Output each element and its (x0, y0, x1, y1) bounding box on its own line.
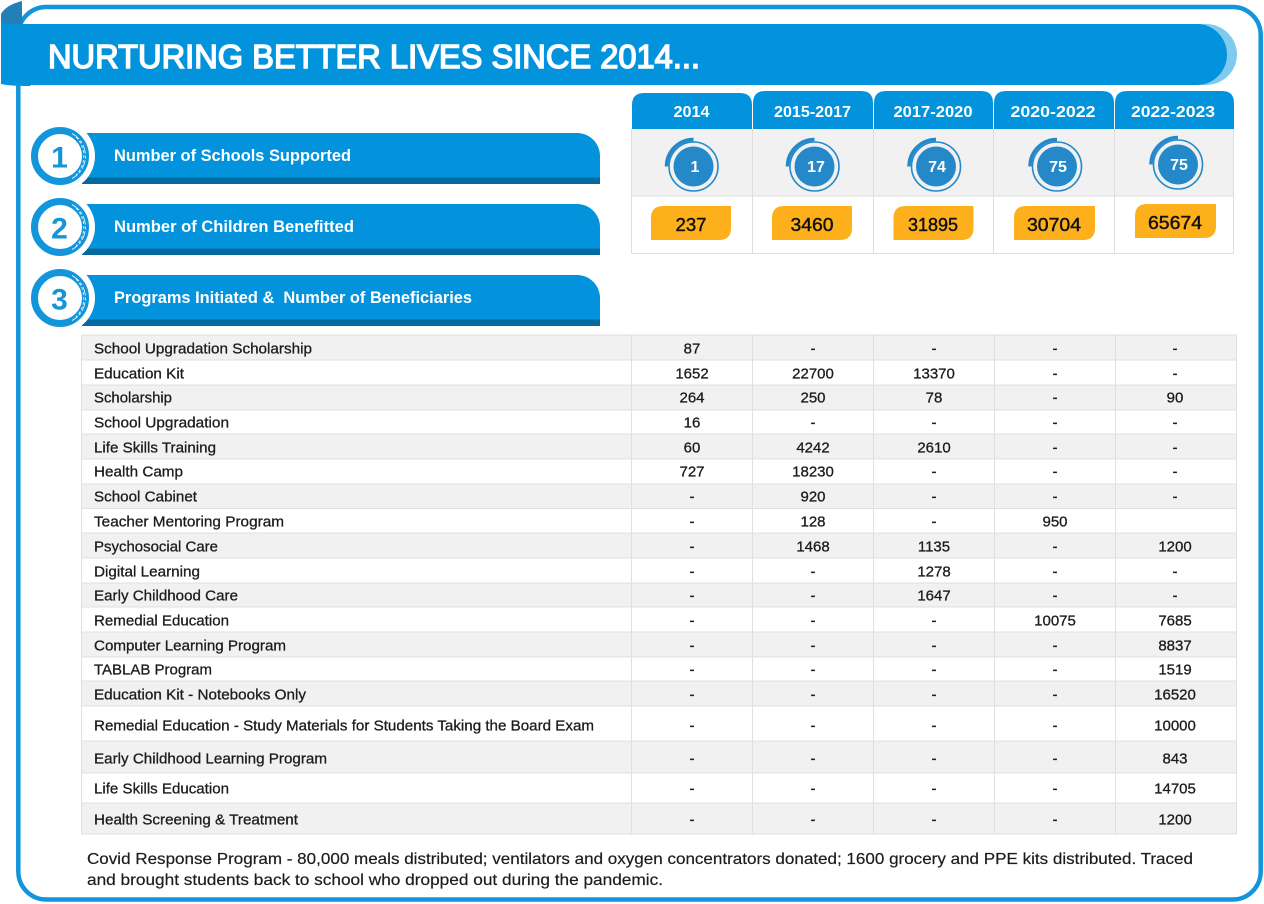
row: School Cabinet: - (690, 488, 694, 505)
row: School Cabinet (94, 488, 1178, 505)
summary table by period (632, 91, 1234, 254)
row: Early Childhood Learning Program: - (810, 750, 816, 767)
row: Health Camp: 18230 (792, 463, 834, 480)
title: NURTURING BETTER LIVES SINCE 2014... (48, 38, 700, 75)
section banner 2: children benefitted: 2 (51, 212, 68, 246)
row: TABLAB Program: - (1052, 661, 1058, 678)
row: TABLAB Program: - (932, 661, 936, 678)
row: Life Skills Education: - (810, 780, 816, 797)
row: Psychosocial Care: - (690, 538, 694, 555)
row: Education Kit: - (1052, 365, 1058, 382)
row: School Cabinet: School Cabinet (94, 488, 198, 505)
row: Digital Learning: - (1172, 563, 1178, 580)
row: Life Skills Education (94, 780, 1196, 797)
children benefitted tags: 237 (676, 214, 706, 235)
row: Remedial Education: 10075 (1034, 612, 1076, 629)
row: Life Skills Training (94, 439, 1178, 456)
section banner 2: children benefitted (25, 192, 600, 262)
row: Early Childhood Care: - (1052, 587, 1058, 604)
row: Computer Learning Program: - (1052, 637, 1058, 654)
row: Teacher Mentoring Program: 128 (800, 513, 826, 530)
row: School Upgradation Scholarship: - (810, 340, 816, 357)
row: Education Kit: Education Kit (94, 365, 185, 382)
row: Health Screening & Treatment (94, 811, 1192, 828)
row: Education Kit: - (1172, 365, 1178, 382)
row: Life Skills Training: 60 (684, 439, 700, 456)
row: Life Skills Training: - (1052, 439, 1058, 456)
row: Health Screening & Treatment: - (810, 811, 816, 828)
row: Digital Learning: - (1052, 563, 1058, 580)
section banner 1: schools supported: 1 (51, 142, 68, 174)
row: School Upgradation Scholarship (94, 340, 1178, 357)
row: Education Kit: 1652 (675, 365, 709, 382)
row: Remedial Education - Study Materials: - (810, 717, 816, 734)
row: Digital Learning (94, 563, 1178, 580)
row: Life Skills Education: - (1052, 780, 1058, 797)
schools supported gauges: 74 (928, 159, 946, 176)
row: School Upgradation Scholarship: 87 (684, 340, 700, 357)
row: Early Childhood Care: 1647 (917, 587, 951, 604)
row: Health Camp: 727 (679, 463, 705, 480)
row: Early Childhood Care: - (810, 587, 816, 604)
row: School Upgradation Scholarship: - (932, 340, 936, 357)
row: Education Kit - Notebooks Only (94, 686, 1196, 703)
row: Scholarship (94, 389, 1183, 406)
row: Health Camp: - (1052, 463, 1058, 480)
period headers (632, 91, 1234, 129)
row: Teacher Mentoring Program: - (932, 513, 936, 530)
row: School Cabinet: 920 (800, 488, 826, 505)
row: Teacher Mentoring Program: - (690, 513, 694, 530)
row: Health Screening & Treatment: - (690, 811, 694, 828)
row: School Cabinet: - (932, 488, 936, 505)
section banner 3: programs initiated: 3 (51, 284, 68, 316)
row: Computer Learning Program (94, 637, 1192, 654)
row: School Upgradation: 16 (684, 414, 700, 431)
row: Early Childhood Care: - (690, 587, 694, 604)
row: School Upgradation: - (932, 414, 936, 431)
section banner 1: schools supported: Number of Schools Supported (114, 147, 351, 165)
children benefitted tags: 30704 (1027, 214, 1081, 235)
row: Computer Learning Program: - (810, 637, 816, 654)
row: Health Camp: - (1172, 463, 1178, 480)
row: Health Screening & Treatment: Health Screening & Treatment (94, 811, 299, 828)
period headers: 2014 (674, 104, 710, 121)
row: Psychosocial Care (94, 538, 1192, 555)
row: Teacher Mentoring Program: 950 (1042, 513, 1068, 530)
row: Health Camp: Health Camp (94, 463, 183, 480)
row: Remedial Education: Remedial Education (94, 612, 229, 629)
row: Remedial Education: - (810, 612, 816, 629)
row: School Upgradation: - (810, 414, 816, 431)
row: TABLAB Program: TABLAB Program (94, 661, 212, 678)
title banner (1, 1, 1237, 86)
children benefitted tags: 65674 (1148, 212, 1202, 233)
row: Education Kit - Notebooks Only: - (1052, 686, 1058, 703)
section banner 1: schools supported (25, 121, 600, 191)
row: Remedial Education - Study Materials (94, 717, 1196, 734)
row: Early Childhood Care: - (1172, 587, 1178, 604)
row: Remedial Education - Study Materials: - (932, 717, 936, 734)
period headers: 2017-2020 (894, 104, 973, 121)
covid response footnote: and brought students back to school who dropped out during the pandemic. (87, 872, 663, 889)
row: Computer Learning Program: - (932, 637, 936, 654)
schools supported gauges: 1 (691, 159, 700, 176)
section banner 2: children benefitted: Number of Children Benefitted (114, 218, 354, 236)
row: Education Kit - Notebooks Only: - (932, 686, 936, 703)
row: Digital Learning: - (810, 563, 816, 580)
row: Early Childhood Learning Program (94, 750, 1188, 767)
row: Education Kit - Notebooks Only: - (810, 686, 816, 703)
row: Education Kit - Notebooks Only: 16520 (1154, 686, 1196, 703)
covid response footnote: Covid Response Program - 80,000 meals distributed; ventilators and oxygen concentrators donated; 1600 grocery and PPE kits distributed. Traced (87, 851, 1193, 868)
schools supported gauges: 17 (807, 159, 825, 176)
row: Computer Learning Program: - (690, 637, 694, 654)
row: Remedial Education - Study Materials: - (690, 717, 694, 734)
row: Education Kit: 22700 (792, 365, 834, 382)
schools supported gauges (666, 138, 1202, 191)
children benefitted tags (651, 204, 1216, 240)
row: Psychosocial Care: 1135 (918, 538, 950, 555)
row: Digital Learning: 1278 (917, 563, 951, 580)
row: School Cabinet: - (1172, 488, 1178, 505)
row: Psychosocial Care: 1200 (1158, 538, 1192, 555)
row: Health Screening & Treatment: - (1052, 811, 1058, 828)
row: School Cabinet: - (1052, 488, 1058, 505)
row: Education Kit - Notebooks Only: - (690, 686, 694, 703)
row: Remedial Education: 7685 (1158, 612, 1192, 629)
row: Scholarship: Scholarship (94, 389, 172, 406)
row: TABLAB Program: - (810, 661, 816, 678)
row: Remedial Education (94, 612, 1192, 629)
row: Life Skills Training: 4242 (796, 439, 830, 456)
row: Psychosocial Care: - (1052, 538, 1058, 555)
row: Life Skills Training: Life Skills Training (94, 439, 216, 456)
row: School Upgradation: - (1172, 414, 1178, 431)
row: Digital Learning: - (690, 563, 694, 580)
row: School Upgradation Scholarship: School Upgradation Scholarship (94, 340, 312, 357)
row: Health Screening & Treatment: - (932, 811, 936, 828)
row: Early Childhood Care (94, 587, 1178, 604)
children benefitted tags: 3460 (790, 214, 834, 235)
row: School Upgradation Scholarship: - (1172, 340, 1178, 357)
row: Health Camp (94, 463, 1178, 480)
period headers: 2015-2017 (774, 104, 851, 121)
row: Early Childhood Learning Program: - (932, 750, 936, 767)
row: Computer Learning Program: Computer Learning Program (94, 637, 286, 654)
row: Life Skills Education: - (690, 780, 694, 797)
row: Life Skills Training: - (1172, 439, 1178, 456)
row: Early Childhood Learning Program: Early Childhood Learning Program (94, 750, 327, 767)
row: Remedial Education: - (932, 612, 936, 629)
children benefitted tags: 31895 (908, 214, 958, 235)
row: Remedial Education - Study Materials: 10000 (1154, 717, 1196, 734)
row: Education Kit (94, 365, 1178, 382)
row: Early Childhood Learning Program: 843 (1162, 750, 1188, 767)
row: Psychosocial Care: Psychosocial Care (94, 538, 218, 555)
row: Remedial Education - Study Materials: Remedial Education - Study Materials for Students Taking the Board Exam (94, 717, 594, 734)
row: Teacher Mentoring Program: Teacher Mentoring Program (94, 513, 284, 530)
period headers: 2022-2023 (1131, 104, 1215, 121)
row: Early Childhood Learning Program: - (690, 750, 694, 767)
row: Early Childhood Learning Program: - (1052, 750, 1058, 767)
covid response footnote (87, 851, 1193, 889)
row: Education Kit: 13370 (913, 365, 955, 382)
row: Education Kit - Notebooks Only: Education Kit - Notebooks Only (94, 686, 306, 703)
row: TABLAB Program: 1519 (1158, 661, 1192, 678)
row: Health Screening & Treatment: 1200 (1158, 811, 1192, 828)
row: Scholarship: 78 (926, 389, 942, 406)
row: TABLAB Program: - (690, 661, 694, 678)
row: Computer Learning Program: 8837 (1158, 637, 1192, 654)
row: Remedial Education - Study Materials: - (1052, 717, 1058, 734)
row: Life Skills Education: Life Skills Education (94, 780, 229, 797)
row: Remedial Education: - (690, 612, 694, 629)
programs table (82, 335, 1236, 834)
row: Early Childhood Care: Early Childhood Care (94, 587, 238, 604)
row: Scholarship: 90 (1167, 389, 1183, 406)
row: School Upgradation: - (1052, 414, 1058, 431)
row: Teacher Mentoring Program (94, 513, 1068, 530)
row: Scholarship: 264 (679, 389, 705, 406)
row: Psychosocial Care: 1468 (796, 538, 830, 555)
row: Life Skills Education: - (932, 780, 936, 797)
section banner 3: programs initiated (25, 263, 600, 333)
row: School Upgradation: School Upgradation (94, 414, 229, 431)
row: TABLAB Program (94, 661, 1192, 678)
row: School Upgradation (94, 414, 1178, 431)
row: Health Camp: - (932, 463, 936, 480)
row: School Upgradation Scholarship: - (1052, 340, 1058, 357)
row: Life Skills Education: 14705 (1154, 780, 1196, 797)
row: Digital Learning: Digital Learning (94, 563, 200, 580)
schools supported gauges: 75 (1049, 159, 1067, 176)
row: Life Skills Training: 2610 (917, 439, 951, 456)
row: Scholarship: - (1052, 389, 1058, 406)
section banner 3: programs initiated: Programs Initiated & Number of Beneficiaries (114, 289, 472, 307)
row: Scholarship: 250 (800, 389, 826, 406)
schools supported gauges: 75 (1170, 157, 1188, 174)
period headers: 2020-2022 (1010, 104, 1096, 121)
